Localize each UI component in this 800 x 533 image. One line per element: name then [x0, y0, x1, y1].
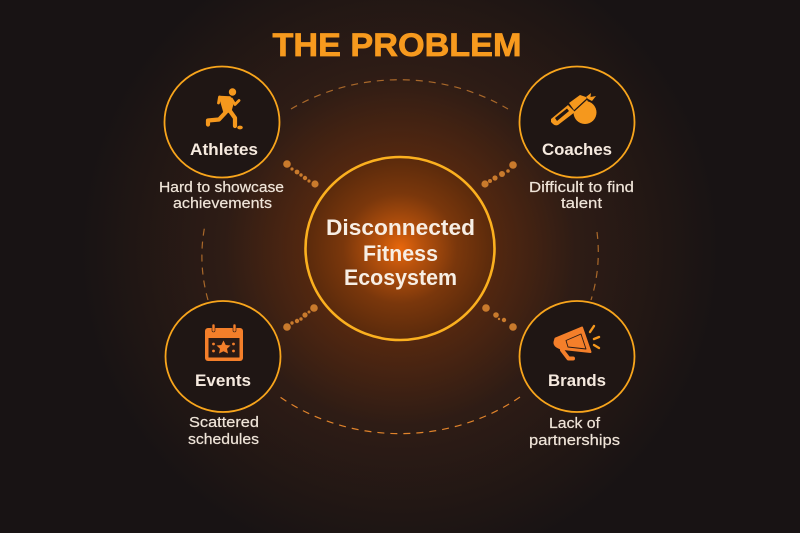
text: events description: schedules: [188, 432, 259, 448]
panel: events: [166, 301, 280, 412]
label: coaches: Coaches: [542, 140, 612, 159]
text: coaches description: talent: [561, 196, 602, 212]
dotted connector: athletes: [283, 160, 319, 188]
text: athletes description: Hard to showcase: [159, 180, 284, 196]
panel: brands: [520, 301, 634, 412]
text: athletes description: [159, 180, 284, 212]
label: events: Events: [195, 371, 251, 390]
connecting dashed ring: [202, 80, 598, 434]
hub label: [326, 215, 475, 290]
panel: central hub: [306, 157, 494, 340]
text: events description: [188, 415, 259, 448]
dotted connector: coaches: [481, 161, 517, 188]
dotted connector: brands: [482, 304, 517, 331]
panel: coaches: [520, 66, 634, 178]
text: coaches description: [529, 180, 634, 212]
text: athletes description: achievements: [173, 196, 272, 212]
text: coaches description: Difficult to find: [529, 180, 634, 196]
hub label: Disconnected: [326, 215, 475, 240]
panel: athletes: [164, 66, 280, 178]
text: brands description: Lack of: [549, 416, 601, 432]
dotted connector: events: [283, 304, 318, 331]
text: brands description: partnerships: [529, 433, 620, 449]
icon: whistle: [551, 93, 596, 125]
label: athletes: Athletes: [190, 140, 258, 159]
icon: calendar: [205, 324, 243, 361]
icon: megaphone: [554, 326, 599, 358]
icon: runner: [208, 88, 243, 129]
text: events description: Scattered: [189, 415, 259, 431]
title: THE PROBLEM: [272, 27, 522, 63]
text: brands description: [529, 416, 620, 449]
hub label: Ecosystem: [344, 265, 457, 290]
hub label: Fitness: [363, 241, 438, 266]
label: brands: Brands: [548, 371, 606, 390]
